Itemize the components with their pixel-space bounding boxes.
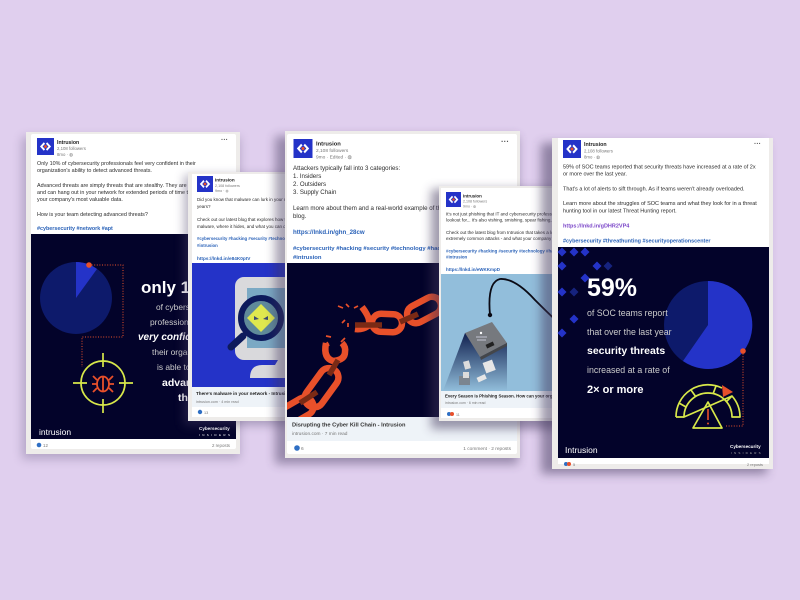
brand footer: intrusion	[39, 427, 71, 437]
brand footer: Cybersecurity	[199, 426, 230, 431]
dotted connector	[725, 351, 743, 426]
post 4 body text: lookout for... It's also vishing, smishing, spear fishing, and	[446, 218, 561, 222]
post 3 body text	[293, 165, 473, 261]
post 3 body text: 2. Outsiders	[293, 181, 326, 188]
panel: post 3 kill chain	[273, 131, 520, 464]
post 3 body text: #intrusion	[293, 255, 322, 261]
post 1 header: ···	[221, 137, 228, 144]
icon: target with bug	[73, 353, 133, 413]
post 5 body text	[563, 164, 757, 244]
brand footer: INSIDERS	[199, 433, 232, 437]
post 2 header: 2,108 followers	[215, 184, 240, 188]
brand footer: INSIDERS	[731, 451, 763, 455]
headline text: advanced	[162, 377, 210, 389]
post 1 infographic image	[31, 234, 236, 439]
brand footer: Intrusion	[565, 445, 598, 455]
post 2 link preview: There's malware in your network - Intrusion	[196, 391, 291, 396]
post 4 reactions	[447, 412, 460, 417]
post 3 header	[294, 137, 509, 160]
panel: post 1 advanced threats	[22, 132, 240, 459]
post 2 body text: #cybersecurity #hacking #security #technology	[197, 236, 294, 241]
post 2 image: monitor and magnifier	[192, 263, 285, 387]
post 5 header: ···	[754, 141, 761, 148]
post 4 body text: https://lnkd.in/eWKKmpD	[446, 267, 501, 272]
post 4 link preview: Every Season is Phishing Season. How can your organization	[445, 394, 571, 398]
post 5 header	[563, 140, 761, 160]
post 5 body text: That's a lot of alerts to sift through. As if teams weren't already overloaded.	[563, 186, 745, 192]
post 4 body text: #cybersecurity #hacking #security #technology #hackers	[446, 248, 566, 254]
headline text: 59%	[587, 274, 637, 302]
panel: post 4 phishing	[424, 182, 552, 436]
post 3 link preview: intrusion.com · 7 min read	[292, 431, 348, 437]
headline text: that over the last year	[587, 327, 672, 337]
post 1 header	[37, 137, 228, 157]
post 3 link preview	[287, 417, 517, 441]
post 1 body text: Advanced threats are simply threats that are stealthy. They are hard to detect	[37, 183, 222, 189]
headline text	[587, 274, 672, 396]
post 4 reactions: 11	[456, 413, 460, 417]
post 3 body text: 1. Insiders	[293, 173, 321, 180]
post 1 body text	[37, 161, 222, 232]
post 3 body text: 3. Supply Chain	[293, 189, 337, 196]
brand footer	[565, 444, 763, 455]
light beam	[443, 333, 507, 391]
post 1 reactions: 12	[43, 443, 48, 448]
post 3 link preview: Disrupting the Cyber Kill Chain - Intrusion	[292, 422, 406, 428]
post 4 body text: It's not just phishing that IT and cybersecurity professionals need to	[446, 212, 580, 216]
pie chart 10 percent	[40, 262, 112, 334]
headline text: only 10%	[141, 278, 215, 297]
post 1 body text: #cybersecurity #network #apt	[37, 226, 113, 232]
post 5 header: 2,108 followers	[584, 148, 613, 154]
post 4 body text: extremely common attacks - and what your company can do	[446, 236, 567, 241]
post 5 body text: https://lnkd.in/gDHR2VP4	[563, 224, 630, 230]
post 2 body text: Did you know that malware can lurk in your network for	[197, 197, 307, 202]
panel: post 2 malware	[178, 169, 285, 431]
post 2 body text: https://lnkd.in/e84K0ptV	[197, 256, 251, 261]
post 4 link preview: intrusion.com · 6 min read	[445, 401, 486, 405]
post 5 reactions	[564, 462, 763, 467]
post 2 reactions: 13	[204, 411, 208, 415]
decorative diamonds	[558, 248, 612, 338]
post 3 body text: Attackers typically fall into 3 categories:	[293, 165, 400, 172]
post 1 body text: your company's most valuable data.	[37, 197, 123, 203]
headline text: 2× or more	[587, 384, 644, 396]
post 2 header	[197, 176, 240, 193]
post 3 body text: #cybersecurity #hacking #security #technology #hackers	[293, 246, 454, 252]
post 1 body text: How is your team detecting advanced threats?	[37, 212, 148, 218]
post 2 link preview	[192, 387, 302, 407]
post 5 reactions: 5	[573, 462, 575, 467]
laptop	[465, 322, 507, 360]
post 2 link preview: intrusion.com · 4 min read	[196, 400, 239, 404]
post 4 image: hooked laptop	[441, 274, 552, 391]
post 3 image: broken chain	[287, 263, 439, 417]
post 5 body text: or more over the last year.	[563, 172, 627, 178]
post 2 body text	[197, 197, 307, 261]
post 4 body text: Check out the latest blog from Intrusion that takes a look at	[446, 230, 564, 235]
post 2 body text: Check out our latest blog that explores how to find	[197, 217, 297, 222]
post 2 body text: years?	[197, 204, 211, 209]
post 1 body text: and can hang out in your network for extended periods of time to access	[37, 190, 210, 196]
post 3 body text: blog.	[293, 213, 307, 220]
post 1 body text: Only 10% of cybersecurity professionals feel very confident in their	[37, 161, 196, 167]
post 2 body text: malware, where it hides, and what you can do	[197, 224, 289, 229]
post 2 body text: #intrusion	[197, 243, 218, 248]
post 4 header: Intrusion	[463, 194, 482, 198]
panel: post 5 SOC teams	[541, 138, 773, 474]
fishing line	[488, 278, 552, 318]
headline text: of SOC teams report	[587, 308, 668, 318]
stolen papers	[459, 360, 496, 385]
headline text: professionals feel	[150, 317, 215, 327]
post 1 header: 8mo · ◍	[57, 152, 73, 157]
post 3 reactions	[294, 445, 512, 452]
post 5 reactions: 2 reposts	[747, 462, 763, 467]
post 5 body text: Learn more about the struggles of SOC teams and what they look for in a threat	[563, 201, 757, 207]
post 2 header: 9mo · ◍	[215, 189, 229, 193]
post 1 reactions: 2 reposts	[212, 443, 231, 448]
post 4 link preview	[441, 391, 571, 408]
post 1 body text: organization's ability to detect advanced threats.	[37, 168, 152, 174]
headline text	[138, 281, 188, 401]
pie chart 59 percent	[664, 281, 752, 369]
post 5 body text: hunting tool in our latest Threat Hunting report.	[563, 208, 677, 214]
post 4 body text	[446, 212, 580, 272]
post 2 header: Intrusion	[215, 178, 235, 182]
post 4 header	[446, 192, 487, 208]
post 5 infographic image	[558, 247, 769, 458]
post 5 header: 8mo · ◍	[584, 154, 600, 160]
post 3 header: Intrusion	[316, 142, 341, 148]
post 3 body text: Learn more about them and a real-world example of the last in our	[293, 205, 473, 212]
post 5 body text: 59% of SOC teams reported that security threats have increased at a rate of 2x	[563, 164, 756, 170]
post 4 header: 9mo · ◍	[463, 204, 477, 208]
post 3 header: 9mo · Edited · ◍	[316, 154, 352, 160]
post 5 body text: #cybersecurity #threathunting #securityoperationscenter	[563, 238, 711, 244]
headline text: very confident	[138, 332, 207, 343]
post 3 header: ···	[501, 137, 509, 146]
headline text: increased at a rate of	[587, 365, 670, 375]
headline text: security threats	[587, 345, 665, 357]
post 1 header: Intrusion	[57, 140, 79, 146]
post 2 reactions	[198, 410, 208, 415]
post 3 reactions: 6	[301, 446, 304, 452]
post 1 header: 2,108 followers	[57, 146, 86, 151]
post 3 body text: https://lnkd.in/ghn_28cw	[293, 229, 365, 236]
post 1 reactions	[37, 443, 231, 448]
headline text: their organization	[152, 347, 217, 357]
dotted connector	[82, 265, 123, 367]
headline text: is able to detect	[157, 362, 216, 372]
post 5 header: Intrusion	[584, 142, 607, 148]
icon: magnifier	[231, 298, 281, 347]
post 3 header: 2,108 followers	[316, 148, 349, 154]
brand footer: Cybersecurity	[730, 444, 761, 449]
headline text: of cybersecurity	[156, 302, 215, 312]
headline text: threats	[178, 392, 213, 404]
post 4 header: 2,108 followers	[463, 200, 487, 204]
post 4 body text: #intrusion	[446, 254, 468, 260]
post 3 reactions: 1 comment · 2 reposts	[463, 446, 512, 452]
icon: gauge with warning	[676, 385, 740, 428]
brand footer	[40, 426, 230, 436]
